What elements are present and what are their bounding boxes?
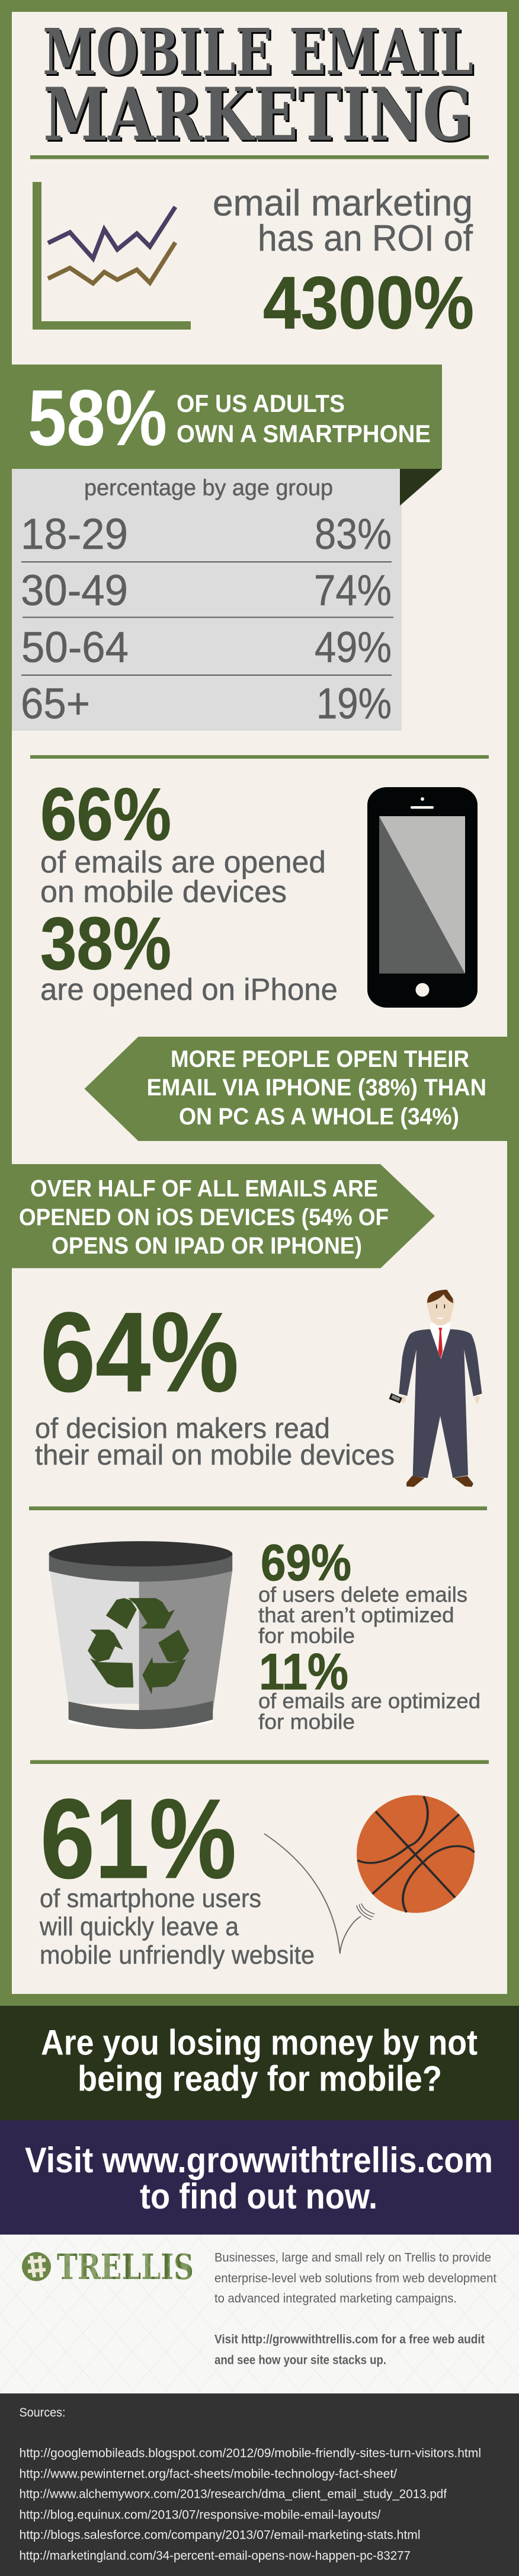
- text block: 69 and 11 percent: 11%: [259, 1644, 348, 1701]
- text: company description: enterprise-level web solutions from web development: [214, 2271, 496, 2286]
- panel: age group table: 19%: [316, 680, 392, 728]
- panel: age group table: [12, 469, 402, 731]
- panel: sources: http://www.alchemyworx.com/2013/research/dma_client_email_study_2013.pdf: [19, 2487, 447, 2501]
- text block: 69 and 11 percent: 69%: [261, 1535, 351, 1591]
- icon: recycling symbol: [88, 1598, 190, 1695]
- text block: email marketing ROI: 4300%: [263, 262, 474, 344]
- text block: 69 and 11 percent: [258, 1535, 480, 1734]
- text block: 66 and 38 percent: are opened on iPhone: [40, 973, 338, 1007]
- ribbon: 58 percent own a smartphone: 58%: [28, 374, 167, 462]
- panel: sources: [0, 2393, 519, 2576]
- panel: age group table: 49%: [315, 624, 392, 672]
- text block: email marketing ROI: [213, 183, 474, 344]
- logo: Trellis: TRELLIS: [57, 2246, 194, 2287]
- chart: line graph icon: [33, 182, 191, 330]
- text block: 69 and 11 percent: for mobile: [258, 1709, 355, 1734]
- arrow: more people open via iPhone: ON PC AS A WHOLE (34%): [179, 1104, 459, 1130]
- title: [43, 15, 475, 159]
- arrow: more people open via iPhone: [84, 1037, 507, 1141]
- text block: 66 and 38 percent: [40, 774, 338, 1007]
- ribbon: 58 percent own a smartphone: OF US ADULTS: [177, 389, 345, 417]
- banner: losing money: being ready for mobile?: [78, 2059, 442, 2098]
- arrow: over half opened on iOS: OVER HALF OF ALL EMAILS ARE: [30, 1176, 378, 1202]
- ribbon: 58 percent own a smartphone: OWN A SMARTPHONE: [177, 420, 431, 448]
- text: company description: Businesses, large and small rely on Trellis to provide: [214, 2251, 491, 2264]
- text: company description: [214, 2251, 496, 2367]
- text block: 64 percent of decision makers: 64%: [40, 1289, 239, 1415]
- text block: 61 percent of smartphone users: [39, 1776, 315, 1970]
- panel: age group table: 30-49: [21, 567, 128, 615]
- panel: Trellis company info: [0, 2235, 519, 2393]
- panel: age group table: 83%: [315, 510, 392, 558]
- panel: sources: Sources:: [19, 2406, 65, 2420]
- text block: 66 and 38 percent: 38%: [40, 903, 171, 985]
- panel: age group table: 65+: [21, 680, 90, 728]
- text block: 61 percent of smartphone users: of smartphone users: [40, 1884, 261, 1913]
- panel: sources: http://blog.equinux.com/2013/07/responsive-mobile-email-layouts/: [19, 2508, 381, 2521]
- text block: 61 percent of smartphone users: mobile unfriendly website: [40, 1941, 315, 1970]
- arrow: more people open via iPhone: MORE PEOPLE OPEN THEIR: [171, 1046, 469, 1072]
- panel: sources: http://www.pewinternet.org/fact-sheets/mobile-technology-fact-sheet/: [19, 2467, 397, 2481]
- text block: 66 and 38 percent: on mobile devices: [40, 875, 287, 909]
- arrow: over half opened on iOS: OPENED ON iOS DEVICES (54% OF: [19, 1204, 389, 1231]
- panel: age group table: 18-29: [21, 510, 128, 558]
- text block: 69 and 11 percent: of users delete emails: [258, 1583, 467, 1606]
- icon: bouncing basketball: [264, 1795, 475, 1954]
- text block: 64 percent of decision makers: of decision makers read: [35, 1413, 330, 1444]
- panel: sources: http://marketingland.com/34-percent-email-opens-now-happen-pc-83277: [19, 2549, 411, 2563]
- icon: businessman with phone: [389, 1290, 482, 1487]
- panel: sources: http://googlemobileads.blogspot.com/2012/09/mobile-friendly-sites-turn-visitors.html: [19, 2447, 481, 2460]
- text: company description: to advanced integrated marketing campaigns.: [214, 2291, 457, 2306]
- panel: sources: http://blogs.salesforce.com/company/2013/07/email-marketing-stats.html: [19, 2529, 421, 2542]
- banner: losing money: Are you losing money by not: [41, 2022, 478, 2063]
- icon: smartphone: [367, 787, 478, 1008]
- text block: 64 percent of decision makers: their email on mobile devices: [35, 1440, 395, 1471]
- arrow: over half opened on iOS: OPENS ON IPAD OR IPHONE): [52, 1233, 362, 1259]
- text: company description: Visit http://growwithtrellis.com for a free web audit: [214, 2333, 485, 2346]
- panel: age group table: 74%: [314, 567, 392, 615]
- icon: recycling bin: [49, 1541, 232, 1730]
- text block: email marketing ROI: email marketing: [213, 183, 473, 224]
- banner: losing money: [0, 2006, 519, 2120]
- ribbon: 58 percent own a smartphone: [0, 365, 442, 506]
- text block: 69 and 11 percent: that aren’t optimized: [258, 1603, 454, 1627]
- arrow: over half opened on iOS: [0, 1164, 435, 1268]
- text block: 61 percent of smartphone users: 61%: [40, 1776, 236, 1902]
- logo: Trellis: [22, 2246, 194, 2287]
- text block: 69 and 11 percent: of emails are optimized: [258, 1689, 480, 1713]
- text: company description: and see how your site stacks up.: [214, 2353, 386, 2367]
- text block: 61 percent of smartphone users: will quickly leave a: [39, 1912, 239, 1941]
- text block: 69 and 11 percent: for mobile: [258, 1623, 355, 1648]
- banner: visit website: to find out now.: [140, 2177, 377, 2216]
- arrow: more people open via iPhone: EMAIL VIA IPHONE (38%) THAN: [147, 1075, 486, 1101]
- panel: age group table: 50-64: [21, 624, 129, 672]
- text block: 64 percent of decision makers: [35, 1289, 395, 1471]
- panel: cream content area: [12, 12, 507, 1994]
- banner: visit website: [0, 2120, 519, 2235]
- panel: age group table: percentage by age group: [84, 475, 333, 500]
- text block: 66 and 38 percent: 66%: [40, 774, 171, 856]
- text block: 66 and 38 percent: of emails are opened: [40, 845, 326, 880]
- text block: email marketing ROI: has an ROI of: [258, 218, 473, 259]
